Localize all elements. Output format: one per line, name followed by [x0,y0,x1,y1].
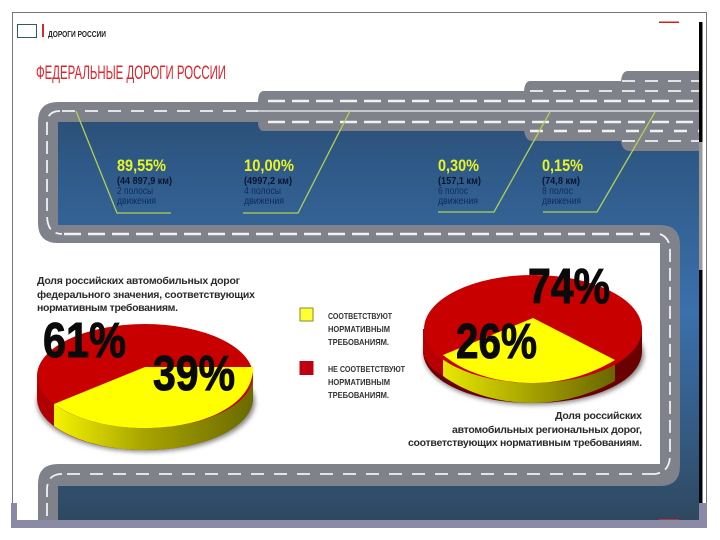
icon: outlined box [18,24,36,38]
red slice [424,275,642,383]
caption: federal roads: Доля российских автомобильных дорог [37,275,241,287]
pie side [423,329,642,403]
legend text: compliant [328,311,393,347]
lanes: 2 полосы [117,186,153,197]
panel: white chart area [14,243,660,465]
label 39%: 39% [153,347,235,401]
kilometres: (74,8 км) [542,176,580,187]
label 61%: 61% [43,314,126,368]
leader line [543,112,655,212]
lanes: 4 полосы [244,186,281,197]
road: dashes [47,81,699,520]
red left side [423,329,443,376]
lanes second line: движения [438,196,478,207]
stat: 8 lanes [542,112,655,212]
caption: federal roads: федерального значения, соответствующих [37,289,255,301]
icon: red bar [42,24,44,37]
leader line [438,112,550,212]
kilometres: (157,1 км) [438,176,481,187]
swatch: yellow [300,308,313,321]
header: section marker [18,24,106,39]
legend text: non-compliant: НЕ СООТВЕТСТВУЮТ [328,364,406,374]
lanes: 6 полос [438,186,468,197]
lanes: 8 полос [542,186,573,197]
swatch: red [300,361,314,375]
right edge bars [699,22,702,520]
gray bar [699,142,702,270]
legend text: compliant: СООТВЕТСТВУЮТ [328,311,393,321]
pie chart: regional roads [423,260,644,405]
red slice [37,324,253,428]
label 74%: 74% [528,260,610,314]
road: upper loop [38,71,699,520]
percent: 89,55% [117,156,166,175]
red mark bottom [659,519,679,520]
legend [300,308,406,400]
lanes second line: движения [117,196,156,207]
legend text: compliant: ТРЕБОВАНИЯМ. [328,337,389,347]
red mark top [659,22,679,23]
yellow slice [443,318,615,383]
panel: blue background [56,120,699,520]
percent: 0,15% [542,156,583,175]
yellow side [54,376,253,450]
yellow slice [54,367,253,428]
percent: 0,30% [438,156,479,175]
title: ФЕДЕРАЛЬНЫЕ ДОРОГИ РОССИИ [36,63,226,84]
road and blue background [14,71,699,520]
leader line [76,111,171,213]
caption: regional roads [408,410,642,449]
legend text: non-compliant: ТРЕБОВАНИЯМ. [328,390,389,400]
red side [37,376,253,450]
pie shadow [424,305,644,405]
pie shadow [37,352,255,452]
kilometres: (4997,2 км) [244,176,292,187]
stat: 6 lanes [438,112,550,212]
caption: regional roads: соответствующих нормативным требованиям. [408,437,642,449]
legend text: compliant: НОРМАТИВНЫМ [328,324,390,334]
stat: 2 lanes [76,111,172,213]
bottom purple frame [11,503,707,528]
label 26%: 26% [456,315,537,369]
caption: regional roads: Доля российских [555,410,642,422]
lanes second line: движения [542,196,581,207]
lanes second line: движения [244,196,284,207]
stat: 4 lanes [243,111,350,213]
kilometres: (44 897,9 км) [117,176,172,187]
black bar bottom [699,270,702,520]
percent: 10,00% [244,156,294,175]
legend text: non-compliant: НОРМАТИВНЫМ [328,377,390,387]
legend text: non-compliant [328,364,406,400]
pie chart: federal roads [37,314,255,452]
yellow side [443,355,615,403]
section heading: ДОРОГИ РОССИИ [48,30,106,39]
caption: regional roads: автомобильных региональных дорог, [452,424,642,436]
caption: federal roads: нормативным требованиям. [37,302,178,314]
leader line [243,111,350,213]
caption: federal roads [37,275,255,314]
black bar top [699,22,702,142]
